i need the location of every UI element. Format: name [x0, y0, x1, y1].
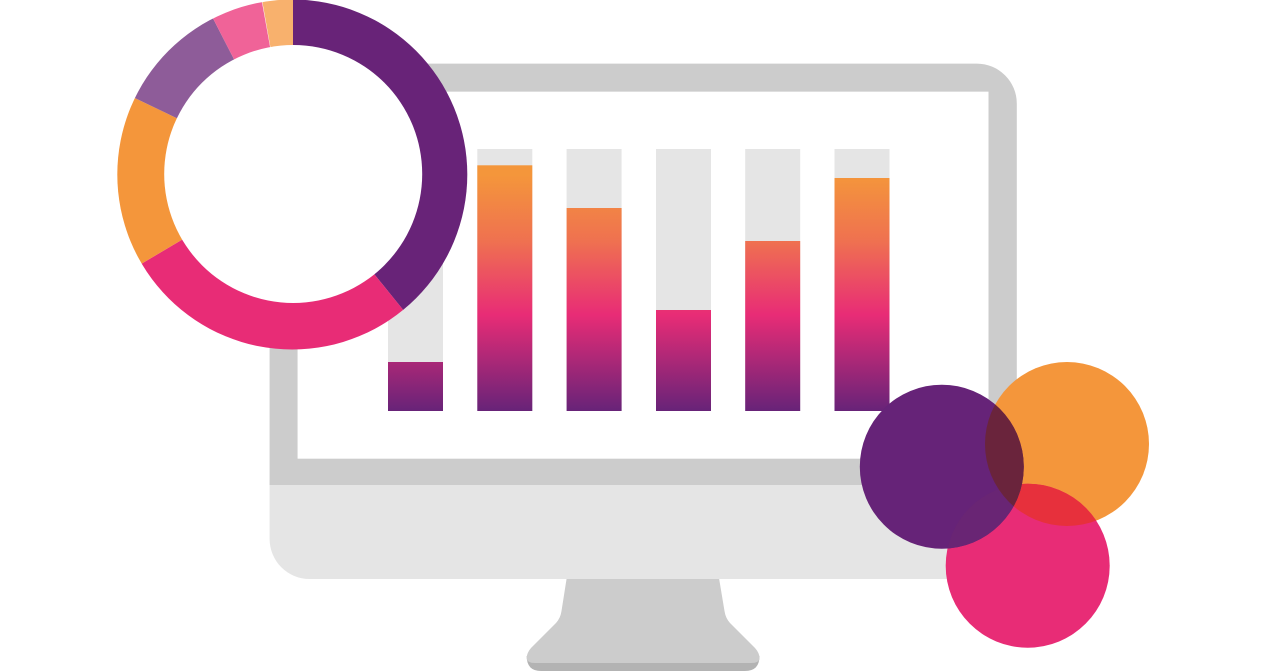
overlapping circles: [860, 362, 1149, 648]
segment: orange: [117, 98, 182, 264]
monitor: [270, 64, 1017, 671]
donut segments: [117, 0, 468, 350]
circle: purple: [860, 385, 1024, 549]
bar 5: [745, 149, 800, 411]
bar 6: [834, 149, 890, 411]
segment: light orange: [262, 0, 293, 47]
overlap: orange and pink: [1014, 484, 1096, 526]
overlap: purple and orange: [985, 404, 1024, 506]
circle: orange: [985, 362, 1149, 526]
segment: lavender: [135, 18, 234, 118]
segment: pink: [142, 240, 404, 350]
overlap: purple and pink: [949, 484, 1022, 548]
bar 2: [477, 149, 532, 411]
circle: pink: [946, 484, 1110, 648]
monitor chin: [270, 480, 1017, 579]
bar 3: [567, 149, 622, 411]
segment: light pink: [213, 2, 270, 60]
bar chart: [388, 149, 890, 411]
screen: [298, 92, 988, 459]
donut hole: [164, 45, 422, 303]
bar 4: [656, 149, 711, 411]
segment: purple: [293, 0, 468, 310]
monitor bezel: [270, 64, 1017, 485]
monitor stand: [527, 578, 760, 671]
donut chart: [117, 0, 468, 350]
bar 1: [388, 149, 443, 411]
